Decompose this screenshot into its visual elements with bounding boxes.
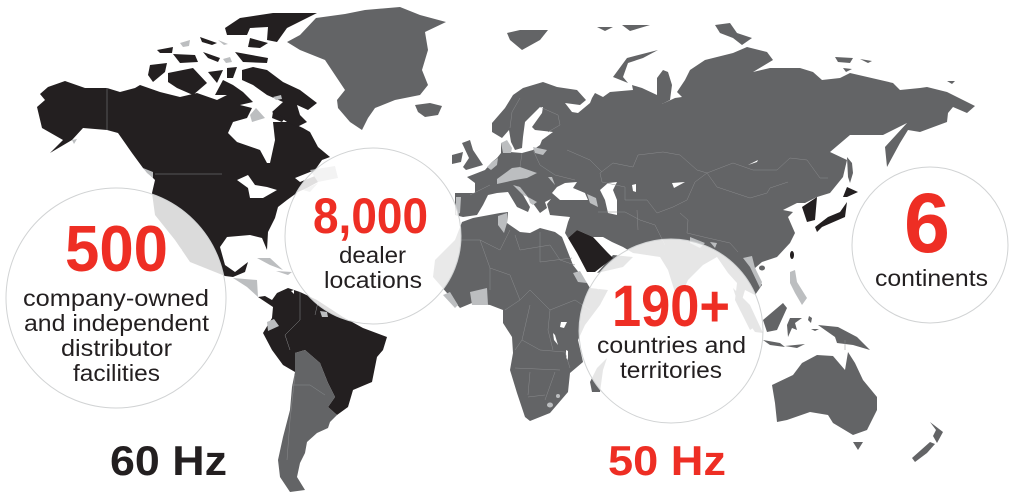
number: 190+: 190+	[612, 274, 730, 339]
Australia	[772, 352, 877, 435]
text: company-owned and independent distributor facilities: company-owned	[23, 285, 209, 311]
60 Hz regions: northern South America	[258, 288, 387, 415]
Africa	[433, 212, 608, 421]
label: 60 Hz: 60 Hz	[110, 437, 227, 484]
light gray regions	[72, 40, 807, 408]
Borneo	[763, 303, 787, 332]
circle: 8,000 dealers	[285, 148, 461, 324]
Tasmania	[853, 442, 863, 450]
text: company-owned and independent distributor facilities	[23, 285, 210, 386]
number: 8,000: 8,000	[313, 188, 428, 244]
Java and lesser islands	[763, 340, 785, 347]
Sumatra	[733, 288, 763, 333]
label: 50 Hz: 50 Hz	[608, 437, 726, 484]
text: company-owned and independent distributor facilities: and independent	[24, 310, 210, 336]
southern South America	[278, 350, 337, 492]
seas and lakes	[168, 150, 763, 360]
Arctic islands	[507, 30, 548, 50]
text: continents: continents	[875, 265, 988, 291]
text: dealer locations	[324, 242, 422, 293]
New Guinea	[818, 325, 870, 350]
Yemen and Oman	[597, 255, 633, 273]
circle: 500 facilities	[6, 188, 226, 408]
50 Hz regions	[278, 7, 975, 492]
Eurasia mainland	[455, 47, 975, 330]
60 Hz regions: Canada, USA, Mexico	[37, 13, 330, 277]
Madagascar	[590, 358, 607, 392]
Ireland and Britain	[452, 152, 463, 164]
text: countries and territories: territories	[620, 357, 722, 383]
number: 500: 500	[65, 212, 168, 285]
circle: 190+ countries	[579, 239, 763, 423]
Seram and Halmahera	[808, 316, 812, 323]
text: countries and territories: countries and	[597, 332, 746, 358]
text: dealer locations: locations	[324, 267, 422, 293]
number: 6: 6	[904, 176, 950, 270]
Iceland	[415, 103, 442, 117]
Sulawesi	[787, 318, 802, 337]
text: countries and territories	[597, 332, 746, 383]
Greenland	[287, 7, 446, 130]
Sakhalin	[847, 157, 853, 183]
country borders	[107, 88, 845, 460]
text: company-owned and independent distributor facilities: facilities	[73, 360, 160, 386]
New Zealand	[930, 422, 943, 443]
Hainan	[759, 266, 765, 270]
text: dealer locations: dealer	[339, 242, 406, 268]
Newfoundland and Nova Scotia	[303, 166, 338, 192]
text: company-owned and independent distributor facilities: distributor	[61, 335, 172, 361]
60 Hz regions: Saudi Arabia, Korea, Japan, Taiwan	[568, 187, 858, 272]
circle: 6 continents	[852, 167, 1008, 323]
